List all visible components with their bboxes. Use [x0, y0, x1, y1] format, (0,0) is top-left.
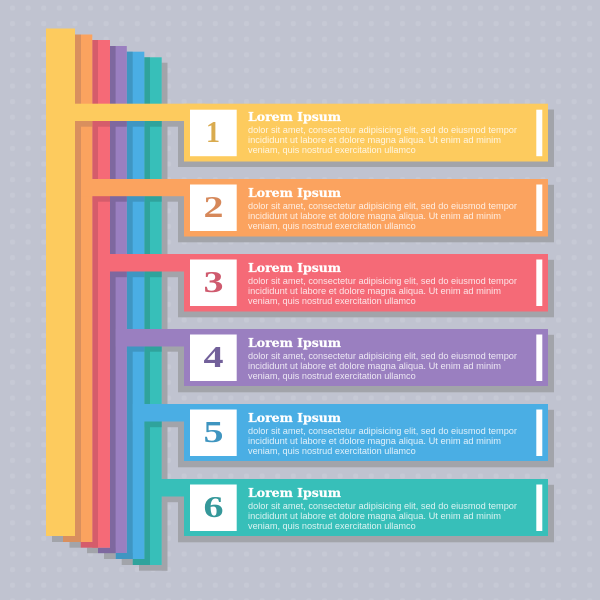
- step 3: red bar and panel: veniam, quis nostrud exercitation ullamco: [248, 295, 416, 306]
- step 4: purple bar and panel: Lorem Ipsum: [248, 335, 341, 350]
- step 6: teal bar and panel: veniam, quis nostrud exercitation ullamco: [248, 520, 416, 531]
- step 6: teal bar and panel: incididunt ut labore et dolore magna aliqua. Ut enim ad minim: [248, 510, 501, 521]
- step 5: blue bar and panel: incididunt ut labore et dolore magna aliqua. Ut enim ad minim: [248, 435, 501, 446]
- step 3: red bar and panel: incididunt ut labore et dolore magna aliqua. Ut enim ad minim: [248, 285, 501, 296]
- step 3: red bar and panel: Lorem Ipsum: [248, 260, 341, 275]
- step 3: red bar and panel: [81, 40, 548, 548]
- step 2: orange bar and panel: veniam, quis nostrud exercitation ullamco: [248, 220, 416, 231]
- step 6: teal bar and panel: Lorem Ipsum: [248, 485, 341, 500]
- step 5: blue bar and panel: 5: [204, 414, 224, 449]
- step 5: blue bar and panel: veniam, quis nostrud exercitation ullamco: [248, 445, 416, 456]
- step 5: blue bar and panel: Lorem Ipsum: [248, 410, 341, 425]
- step 1: yellow bar and panel: Lorem Ipsum: [248, 109, 341, 124]
- step 2: orange bar and panel: [63, 34, 548, 542]
- step 6: teal bar and panel: [133, 57, 548, 565]
- step 6: teal bar and panel: 6: [204, 489, 224, 524]
- step 1: yellow bar and panel: [46, 28, 548, 536]
- step 3: red bar and panel: 3: [204, 264, 224, 299]
- step 3: red bar and panel: dolor sit amet, consectetur adipisicing elit, sed do eiusmod tempor: [248, 275, 517, 286]
- step 6: teal bar and panel: dolor sit amet, consectetur adipisicing elit, sed do eiusmod tempor: [248, 500, 517, 511]
- step 4: purple bar and panel: veniam, quis nostrud exercitation ullamco: [248, 370, 416, 381]
- step 1: yellow bar and panel: veniam, quis nostrud exercitation ullamco: [248, 144, 416, 155]
- step 1: yellow bar and panel: incididunt ut labore et dolore magna aliqua. Ut enim ad minim: [248, 134, 501, 145]
- step 2: orange bar and panel: dolor sit amet, consectetur adipisicing elit, sed do eiusmod tempor: [248, 200, 517, 211]
- step 2: orange bar and panel: incididunt ut labore et dolore magna aliqua. Ut enim ad minim: [248, 210, 501, 221]
- step 2: orange bar and panel: 2: [204, 189, 224, 224]
- step 2: orange bar and panel: Lorem Ipsum: [248, 185, 341, 200]
- step 4: purple bar and panel: [98, 46, 548, 553]
- step 4: purple bar and panel: dolor sit amet, consectetur adipisicing elit, sed do eiusmod tempor: [248, 350, 517, 361]
- step 1: yellow bar and panel: 1: [206, 114, 220, 149]
- step 1: yellow bar and panel: dolor sit amet, consectetur adipisicing elit, sed do eiusmod tempor: [248, 124, 517, 135]
- drop shadows: [52, 63, 554, 571]
- step 5: blue bar and panel: dolor sit amet, consectetur adipisicing elit, sed do eiusmod tempor: [248, 425, 517, 436]
- step 4: purple bar and panel: 4: [204, 339, 224, 374]
- step 4: purple bar and panel: incididunt ut labore et dolore magna aliqua. Ut enim ad minim: [248, 360, 501, 371]
- step 5: blue bar and panel: [116, 52, 548, 559]
